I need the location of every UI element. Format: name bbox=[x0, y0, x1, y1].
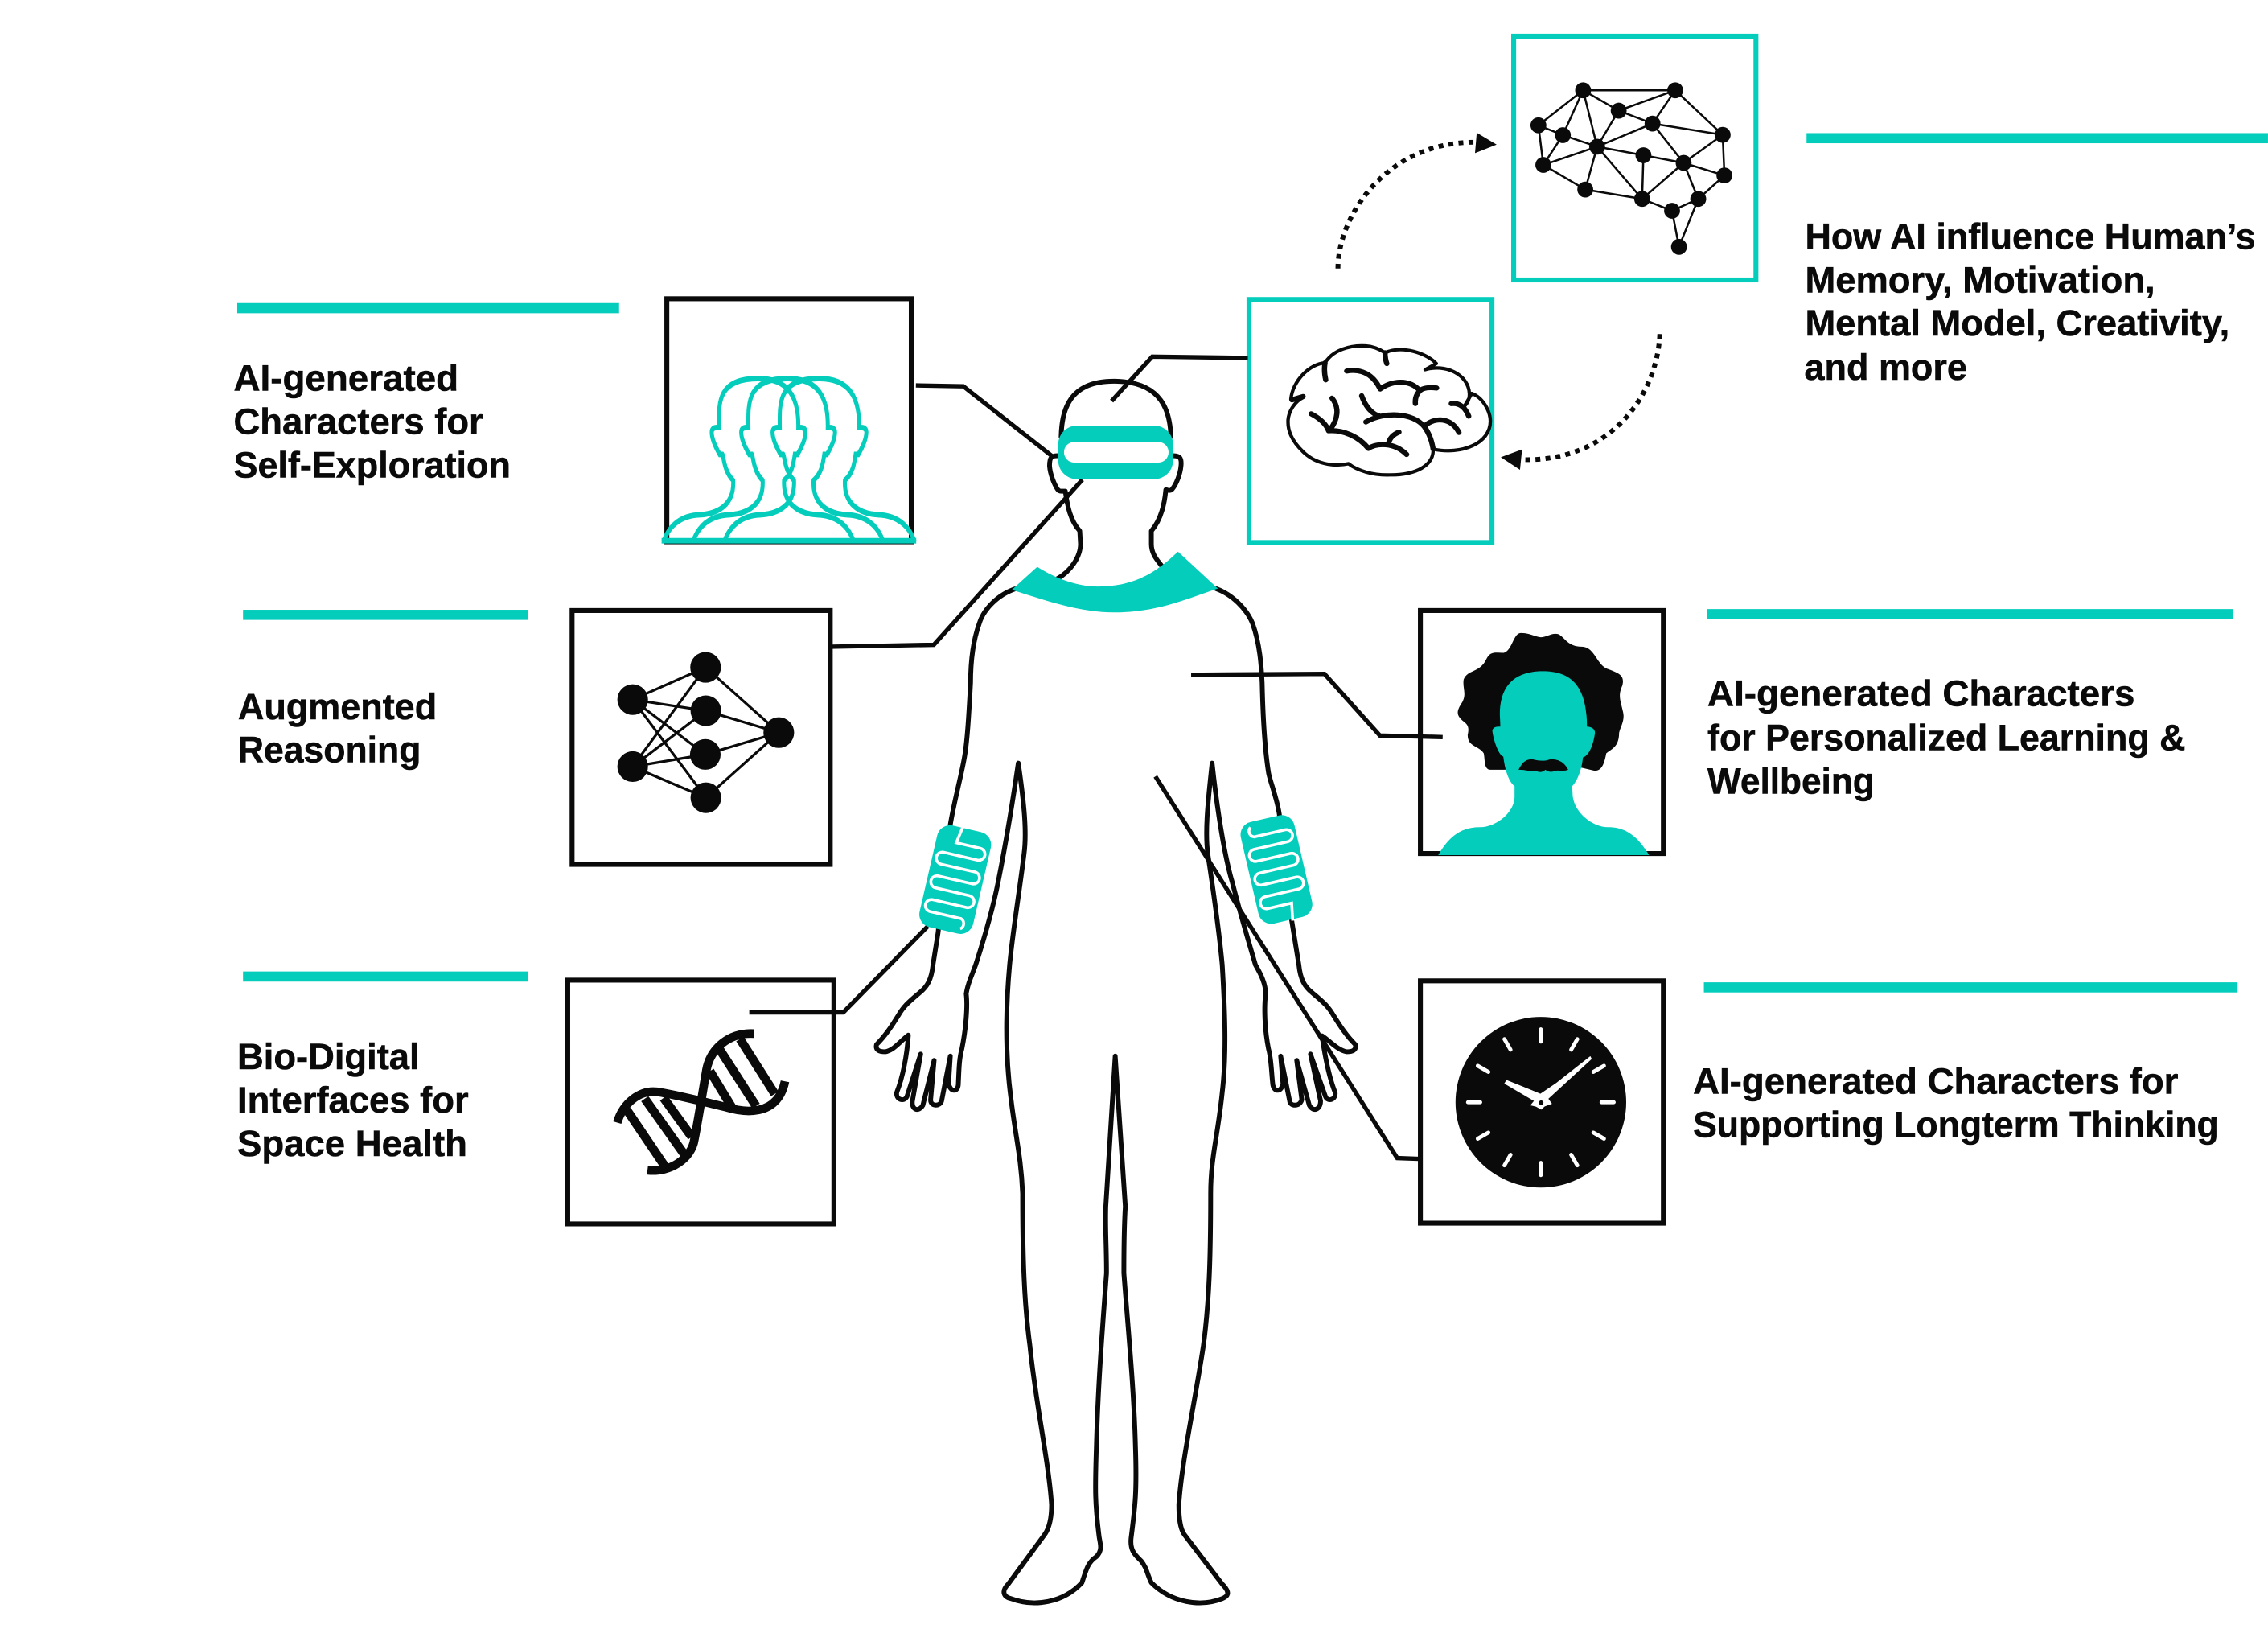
accent bar: personalized learning bbox=[1707, 609, 2233, 619]
icon: three overlapping head outlines bbox=[662, 379, 916, 541]
text: augmented reasoning bbox=[238, 686, 437, 771]
accent bar: longterm thinking bbox=[1704, 982, 2237, 993]
panel: longterm thinking clock bbox=[1420, 981, 1663, 1224]
panel: biological brain bbox=[1249, 299, 1492, 542]
icon: character portrait with curly hair and moustache bbox=[1438, 633, 1649, 855]
text: personalized learning: for Personalized Learning & bbox=[1707, 717, 2185, 758]
text: bio-digital interfaces: Space Health bbox=[237, 1123, 467, 1164]
text: longterm thinking bbox=[1693, 1061, 2219, 1146]
left ear and neck bbox=[1050, 455, 1080, 578]
text: bio-digital interfaces bbox=[237, 1036, 469, 1164]
icon: network brain bbox=[1530, 82, 1732, 255]
arrow: network to brain bbox=[1501, 334, 1660, 470]
accent bar: self-exploration bbox=[237, 303, 619, 313]
text: memory and motivation: and more bbox=[1805, 347, 1967, 388]
text: augmented reasoning: Reasoning bbox=[238, 730, 421, 771]
text: personalized learning: AI-generated Characters bbox=[1707, 673, 2134, 714]
leader: augmented reasoning bbox=[832, 479, 1083, 647]
leader: self-exploration bbox=[916, 385, 1051, 455]
neck collar device bbox=[1012, 552, 1218, 612]
accent bar: bio-digital bbox=[243, 972, 528, 981]
icon: neural network bbox=[618, 652, 794, 813]
text: self-exploration: AI-generated bbox=[233, 358, 458, 399]
torso, arms and legs bbox=[877, 589, 1356, 1603]
accent bar: memory bbox=[1806, 133, 2268, 143]
text: longterm thinking: Supporting Longterm Thinking bbox=[1693, 1105, 2219, 1146]
panel: AI brain network bbox=[1514, 36, 1756, 280]
text: memory and motivation bbox=[1805, 216, 2256, 388]
text: longterm thinking: AI-generated Characters for bbox=[1693, 1061, 2178, 1102]
right ear and neck bbox=[1152, 455, 1181, 566]
text: augmented reasoning: Augmented bbox=[238, 686, 437, 727]
icon: brain outline bbox=[1288, 346, 1490, 475]
leader: personalized learning bbox=[1191, 674, 1443, 737]
leader: longterm thinking bbox=[1156, 776, 1419, 1159]
panel: self-exploration characters bbox=[662, 298, 916, 542]
text: memory and motivation: Mental Model, Creativity, bbox=[1805, 302, 2229, 343]
right wristband sensor bbox=[1238, 812, 1315, 928]
head outline bbox=[1061, 381, 1171, 437]
text: bio-digital interfaces: Interfaces for bbox=[237, 1080, 469, 1121]
leader: bio-digital bbox=[750, 927, 928, 1013]
text: bio-digital interfaces: Bio-Digital bbox=[237, 1036, 420, 1077]
icon: DNA helix bbox=[617, 1034, 785, 1170]
text: self-exploration: Self-Exploration bbox=[233, 444, 511, 485]
left wristband sensor bbox=[917, 821, 994, 936]
panel: personalized learning character bbox=[1420, 611, 1663, 855]
text: memory and motivation: How AI influence Human’s bbox=[1805, 216, 2256, 257]
text: personalized learning: Wellbeing bbox=[1707, 760, 1875, 801]
VR headset bbox=[1058, 426, 1173, 479]
icon: clock bbox=[1456, 1017, 1626, 1187]
text: memory and motivation: Memory, Motivation, bbox=[1805, 259, 2155, 300]
text: self-exploration bbox=[233, 358, 511, 485]
body outline figure bbox=[877, 381, 1356, 1603]
panel: augmented reasoning bbox=[572, 611, 830, 865]
leader lines from body to panels bbox=[750, 356, 1443, 1159]
text: personalized learning bbox=[1707, 673, 2185, 801]
leader: brain bbox=[1111, 356, 1248, 401]
arrow: brain to network bbox=[1338, 133, 1497, 269]
panel: bio-digital interfaces bbox=[568, 980, 834, 1224]
accent bar: reasoning bbox=[243, 610, 528, 620]
text: self-exploration: Characters for bbox=[233, 401, 483, 442]
